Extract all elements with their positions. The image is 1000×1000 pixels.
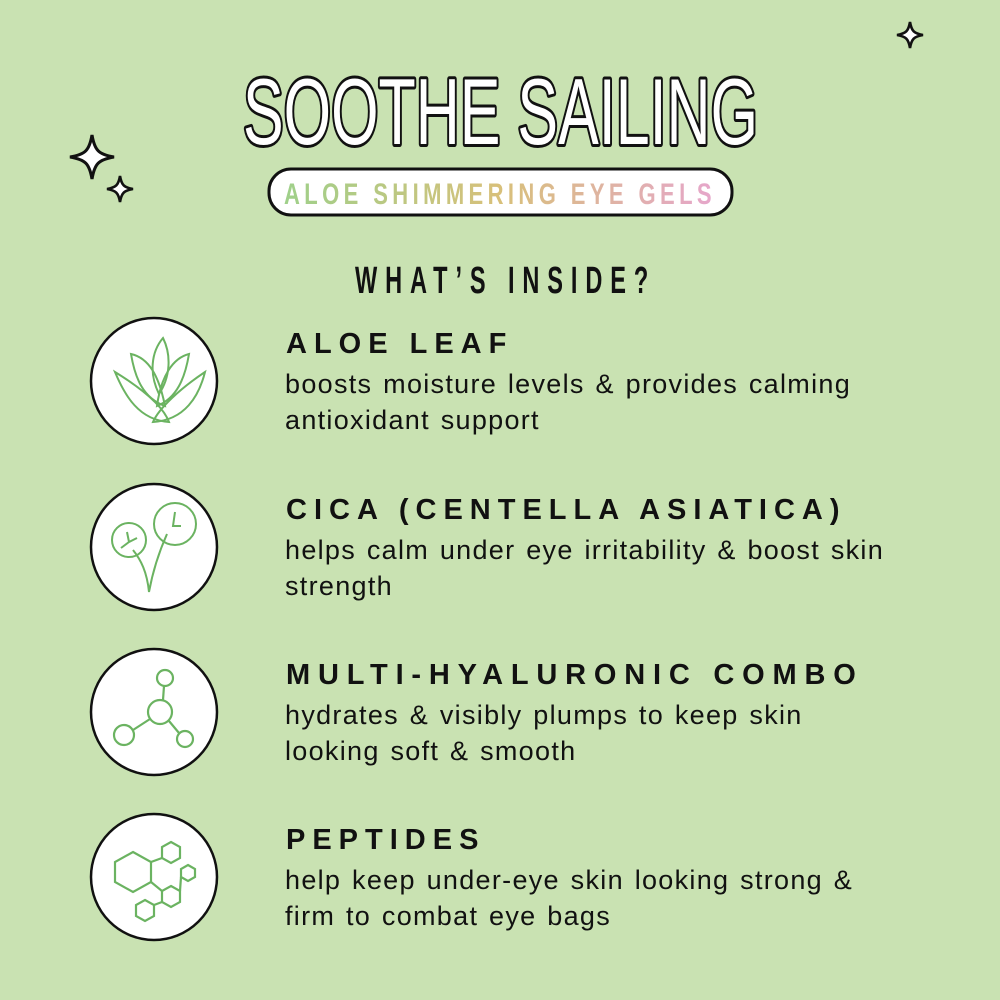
icon: molecule [90,648,218,776]
text: aloe [285,369,851,435]
text: cica: strength [285,571,393,601]
text: aloe: antioxidant support [285,405,540,435]
icon: aloe [90,316,218,446]
sparkle: top right [897,22,923,48]
row: aloe leaf [90,316,851,446]
icon: cica [90,482,218,612]
text: hyaluronic: hydrates & visibly plumps to keep skin [285,700,803,730]
row: hyaluronic [90,648,864,776]
row: cica [90,482,884,612]
text: aloe: boosts moisture levels & provides calming [285,369,851,399]
row: peptides [90,812,853,942]
text: hyaluronic: looking soft & smooth [285,736,576,766]
text: hyaluronic [285,700,803,766]
heading: hyaluronic: MULTI-HYALURONIC COMBO [286,659,864,691]
sparkle: left large [70,135,114,179]
text: peptides: firm to combat eye bags [285,901,611,931]
heading: aloe leaf: ALOE LEAF [286,328,513,360]
subtitle pill [268,168,734,216]
text: cica [285,535,884,601]
text: cica: helps calm under eye irritability & boost skin [285,535,884,565]
heading: cica: CICA (CENTELLA ASIATICA) [286,494,847,526]
icon: peptides [90,812,218,942]
sparkle: left small [107,176,133,202]
text: peptides: help keep under-eye skin looking strong & [285,865,853,895]
text: peptides [285,865,853,931]
heading: peptides: PEPTIDES [286,824,485,856]
